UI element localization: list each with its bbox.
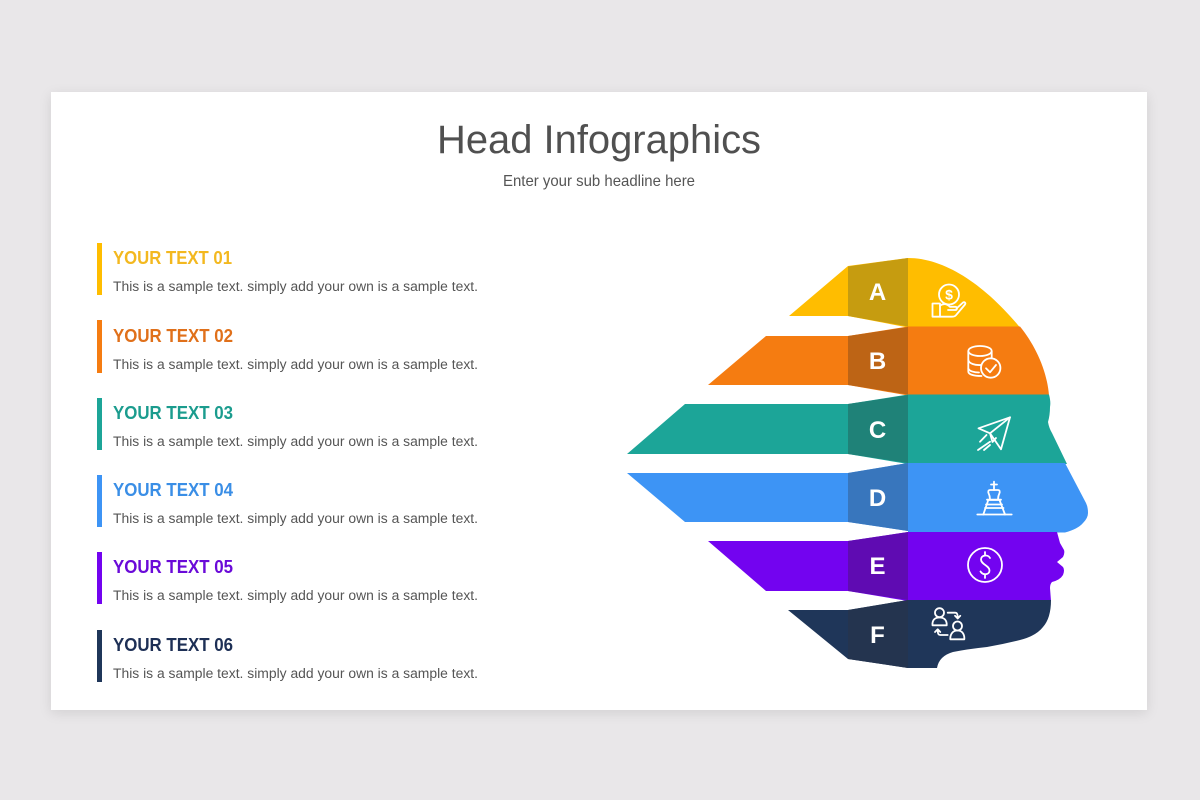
head band A bbox=[789, 258, 1020, 328]
list item 03 bbox=[97, 398, 478, 450]
head band C bbox=[627, 394, 1067, 464]
head band B: B bbox=[869, 348, 886, 375]
list item 05: This is a sample text. simply add your own is a sample text. bbox=[113, 588, 478, 603]
title: Head Infographics bbox=[437, 118, 761, 162]
list item 03: YOUR TEXT 03 bbox=[113, 403, 233, 423]
icon: dollar coin bbox=[968, 548, 1002, 582]
head band E bbox=[708, 532, 1064, 601]
head band F bbox=[788, 600, 1051, 668]
list item 04 bbox=[97, 475, 478, 527]
list item 02: This is a sample text. simply add your own is a sample text. bbox=[113, 357, 478, 372]
icon: hand holding coin: $ bbox=[945, 286, 953, 302]
list item 02: YOUR TEXT 02 bbox=[113, 326, 233, 346]
list item 05 bbox=[97, 552, 478, 604]
list item 04: This is a sample text. simply add your own is a sample text. bbox=[113, 511, 478, 526]
head band D bbox=[627, 463, 1088, 532]
head band B bbox=[708, 326, 1049, 396]
list item 05: YOUR TEXT 05 bbox=[113, 557, 233, 577]
head band E: E bbox=[869, 553, 886, 580]
list item 01: YOUR TEXT 01 bbox=[113, 248, 232, 268]
head band C: C bbox=[869, 417, 886, 444]
subtitle: Enter your sub headline here bbox=[503, 173, 695, 190]
list item 01 bbox=[97, 243, 478, 295]
list item 04: YOUR TEXT 04 bbox=[113, 480, 233, 500]
list item 06: YOUR TEXT 06 bbox=[113, 635, 233, 655]
head band A: A bbox=[869, 279, 886, 306]
list item 01: This is a sample text. simply add your own is a sample text. bbox=[113, 279, 478, 294]
list item 06 bbox=[97, 630, 478, 682]
icon: database with check bbox=[968, 346, 1000, 378]
icon: people exchange bbox=[932, 608, 964, 639]
icon: chess king bbox=[977, 482, 1012, 514]
panel: white card bbox=[51, 92, 1147, 710]
icon: paper plane bbox=[978, 417, 1010, 450]
list item 03: This is a sample text. simply add your own is a sample text. bbox=[113, 434, 478, 449]
head band F: F bbox=[870, 622, 885, 649]
list item 06: This is a sample text. simply add your own is a sample text. bbox=[113, 666, 478, 681]
icon: hand holding coin bbox=[932, 284, 965, 317]
list item 02 bbox=[97, 320, 478, 373]
head band D: D bbox=[869, 485, 886, 512]
